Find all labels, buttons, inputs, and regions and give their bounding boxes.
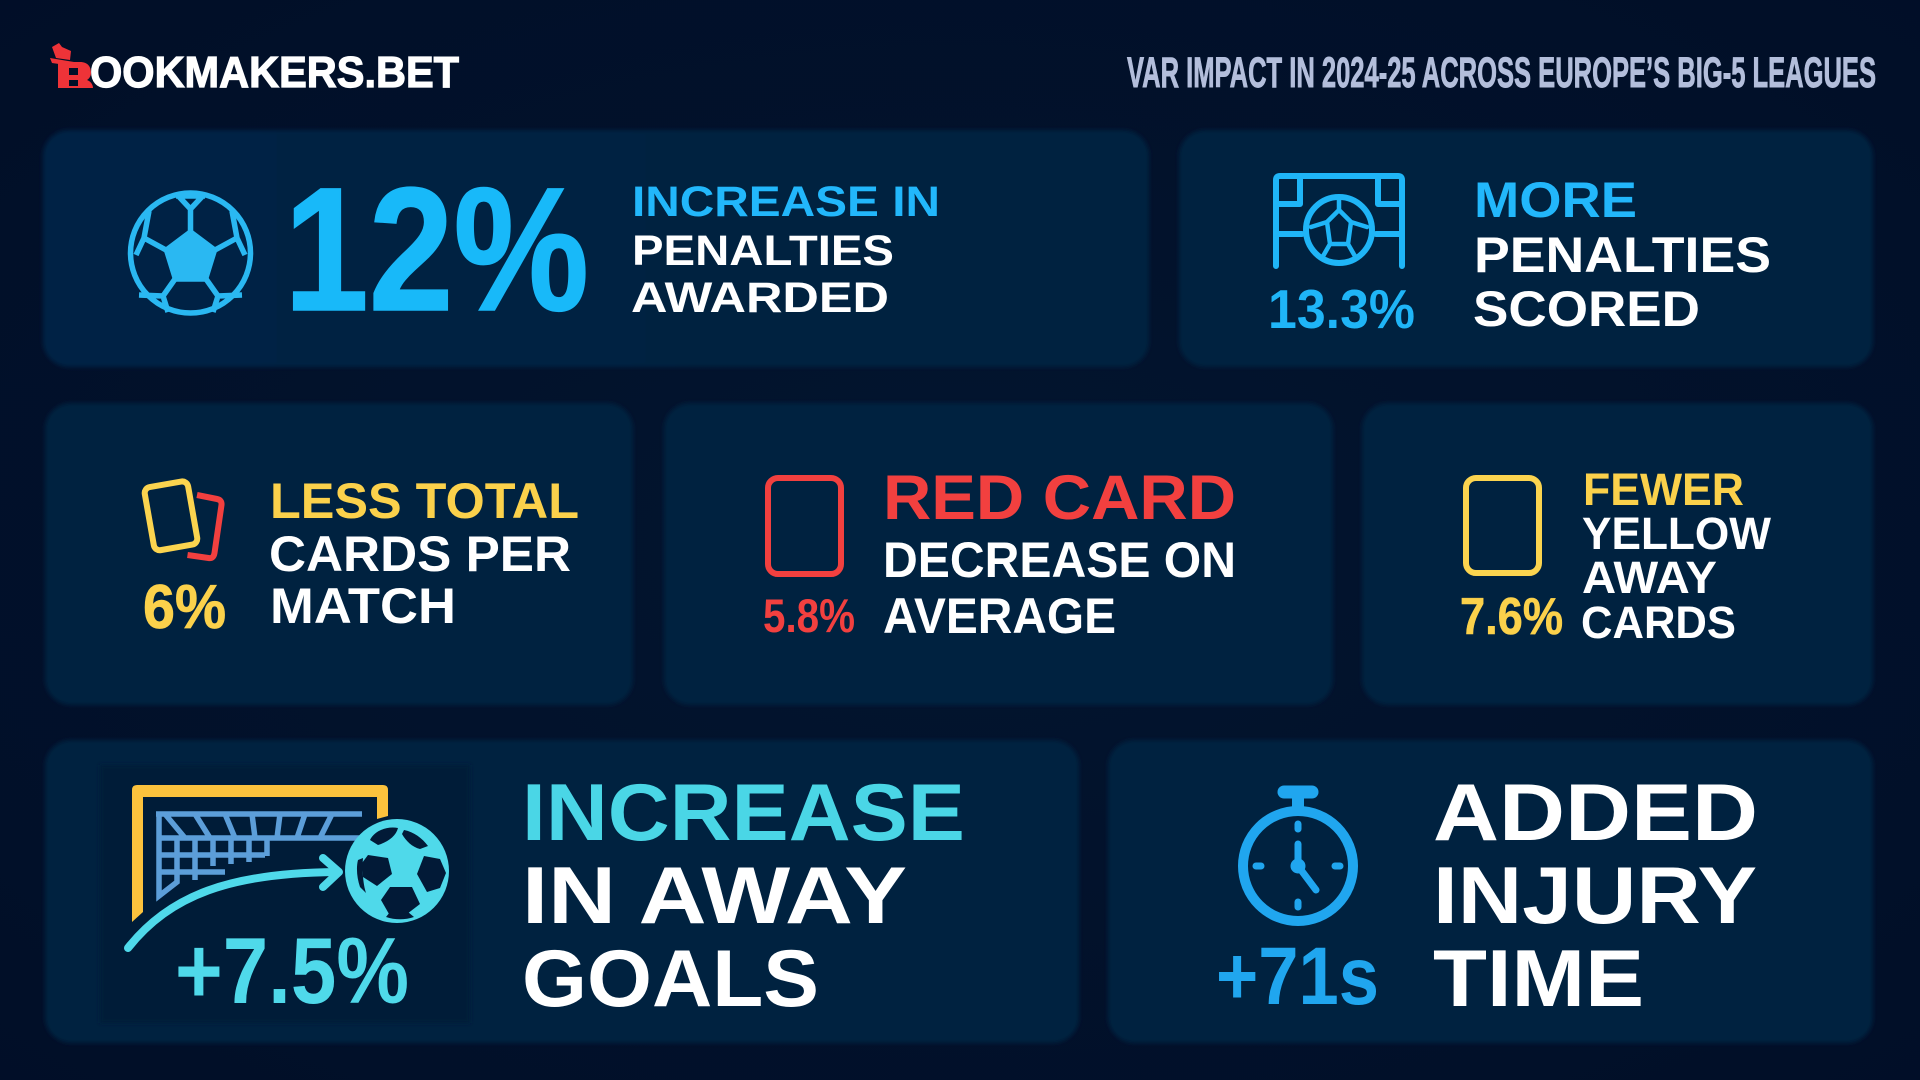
label: LESS TOTAL: [270, 473, 579, 529]
panel: injury time: [1108, 740, 1873, 1043]
label: YELLOW: [1582, 508, 1772, 559]
panel: red card: [664, 403, 1333, 705]
stat 7.6%: 7.6%: [1460, 588, 1563, 646]
label: [631, 178, 940, 322]
label: [1473, 172, 1771, 337]
big number 12%: 12%: [284, 152, 589, 348]
label: TIME: [1433, 934, 1644, 1024]
label: INCREASE: [522, 768, 965, 858]
label: GOALS: [522, 934, 819, 1024]
label: [1433, 768, 1758, 1024]
icon: stopwatch: [1243, 792, 1353, 921]
label: DECREASE ON: [883, 532, 1236, 588]
label: RED CARD: [883, 463, 1236, 533]
label: FEWER: [1583, 464, 1744, 515]
panel: penalties awarded: [43, 130, 1149, 367]
icon: football: [345, 819, 449, 923]
label: PENALTIES: [632, 227, 894, 275]
logo wordmark: OOKMAKERS.BET: [90, 48, 459, 97]
label: AWARDED: [631, 274, 889, 322]
panel: penalties scored: [1179, 130, 1873, 367]
icon: yellow card: [1466, 478, 1539, 573]
panel: total cards: [45, 403, 633, 705]
label: ADDED: [1433, 768, 1758, 858]
label: MATCH: [270, 578, 456, 634]
label: [269, 473, 579, 634]
icon: two cards: [144, 480, 222, 558]
icon: red hat: [50, 43, 74, 66]
label: IN AWAY: [522, 851, 907, 941]
label: [522, 768, 965, 1024]
label: AVERAGE: [883, 588, 1116, 644]
arrow: [128, 858, 339, 948]
stat +7.5%: +7.5%: [175, 918, 409, 1023]
logo: [50, 43, 459, 97]
stat 13.3%: 13.3%: [1268, 278, 1415, 340]
label: [1581, 464, 1772, 648]
panel: away goals: [45, 740, 1079, 1043]
label: CARDS PER: [269, 526, 571, 582]
label: AWAY: [1582, 552, 1717, 603]
label: PENALTIES: [1474, 227, 1771, 283]
label: MORE: [1474, 172, 1637, 228]
label: INJURY: [1433, 851, 1757, 941]
label: CARDS: [1581, 597, 1736, 648]
label: SCORED: [1473, 281, 1700, 337]
icon: goal frame: [132, 785, 388, 922]
panel: yellow cards: [1362, 403, 1873, 705]
stat +71s: +71s: [1216, 931, 1379, 1022]
label: INCREASE IN: [632, 178, 940, 226]
label: [883, 463, 1236, 644]
icon: red card: [768, 478, 841, 574]
stat 6%: 6%: [143, 573, 226, 642]
icon: goal net: [156, 814, 362, 896]
icon: goal and ball: [1276, 176, 1402, 266]
icon: football outline: [130, 193, 250, 313]
stat 5.8%: 5.8%: [763, 589, 855, 642]
logo letter B: [58, 62, 93, 88]
